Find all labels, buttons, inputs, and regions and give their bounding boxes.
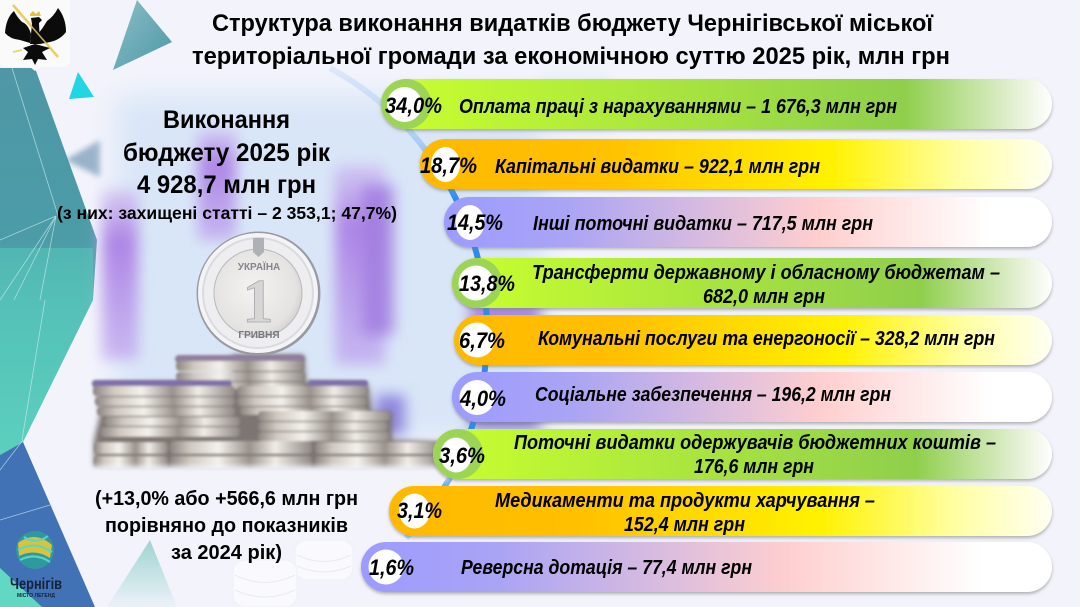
bar: 13,8% transfers: Трансферти державному і обласному бюджетам – xyxy=(532,262,1000,284)
blue arc connector xyxy=(330,68,487,538)
comparison with 2024 text: за 2024 рік) xyxy=(171,541,282,564)
bar: 14,5% other current: 14,5% xyxy=(447,210,503,235)
budget summary text: (з них: захищені статті – 2 353,1; 47,7%) xyxy=(57,203,397,223)
bar: 3,1% medicines: 3,1% xyxy=(397,498,442,523)
bar: 3,1% medicines: Медикаменти та продукти харчування – xyxy=(495,490,875,512)
bar: 34,0% wages: Оплата праці з нарахуваннями – 1 676,3 млн грн xyxy=(459,96,897,118)
comparison with 2024 text: (+13,0% або +566,6 млн грн xyxy=(95,487,358,510)
bar: 4,0% social: Соціальне забезпечення – 196,2 млн грн xyxy=(535,384,891,406)
budget summary text: Виконання xyxy=(163,106,290,134)
hryvnia coin: УКРАЇНА xyxy=(238,260,280,273)
bar: 13,8% transfers: 682,0 млн грн xyxy=(703,286,825,308)
bar: 4,0% social: 4,0% xyxy=(459,386,506,411)
comparison with 2024 text: порівняно до показників xyxy=(105,514,348,537)
coin stack xyxy=(85,355,450,480)
bar: 13,8% transfers: 13,8% xyxy=(459,271,515,296)
bar: 18,7% capital: 18,7% xyxy=(420,153,477,178)
bar: 6,7% utilities xyxy=(454,315,1052,365)
bar: 18,7% capital xyxy=(420,139,1052,189)
bar: 3,6% recipients: Поточні видатки одержувачів бюджетних коштів – xyxy=(514,432,996,454)
hryvnia coin: ГРИВНЯ xyxy=(238,330,280,341)
hryvnia coin: 1 xyxy=(242,268,274,336)
title: Структура виконання видатків бюджету Чернігівської міської xyxy=(212,10,934,37)
comparison with 2024 text xyxy=(95,487,358,564)
bar: 1,6% reverse subsidy xyxy=(361,542,1052,592)
faint decorative coins and triangle xyxy=(107,540,353,607)
bar: 34,0% wages xyxy=(381,79,1052,129)
bar: 18,7% capital: Капітальні видатки – 922,1 млн грн xyxy=(495,156,820,178)
bar: 34,0% wages: 34,0% xyxy=(385,93,442,118)
bar: 13,8% transfers xyxy=(452,258,1052,308)
budget summary text xyxy=(57,106,397,223)
bar: 3,6% recipients: 176,6 млн грн xyxy=(694,456,814,478)
city logo xyxy=(10,531,62,599)
left geometric background xyxy=(0,0,172,607)
background photo: blurred bars xyxy=(102,75,610,440)
title: територіальної громади за економічною суттю 2025 рік, млн грн xyxy=(192,43,950,70)
city logo: Чернігів xyxy=(10,576,62,593)
title xyxy=(192,10,950,70)
budget summary text: 4 928,7 млн грн xyxy=(137,171,316,199)
budget summary text: бюджету 2025 рік xyxy=(123,139,330,167)
bar: 4,0% social xyxy=(452,372,1052,422)
bar: 14,5% other current xyxy=(444,197,1052,247)
Chernihiv coat of arms xyxy=(0,0,70,71)
bar: 3,1% medicines: 152,4 млн грн xyxy=(624,514,745,536)
city logo: МІСТО ЛЕГЕНД xyxy=(17,593,55,599)
bar: 1,6% reverse subsidy: Реверсна дотація – 77,4 млн грн xyxy=(461,557,752,579)
bar: 6,7% utilities: 6,7% xyxy=(459,328,505,353)
hryvnia coin xyxy=(196,232,320,356)
bar: 3,6% recipients xyxy=(433,429,1052,479)
bar: 3,6% recipients: 3,6% xyxy=(439,443,485,468)
bar: 14,5% other current: Інші поточні видатки – 717,5 млн грн xyxy=(533,213,873,235)
bar: 6,7% utilities: Комунальні послуги та енергоносії – 328,2 млн грн xyxy=(538,328,995,350)
bar: 3,1% medicines xyxy=(389,486,1052,536)
bar: 1,6% reverse subsidy: 1,6% xyxy=(369,555,414,580)
